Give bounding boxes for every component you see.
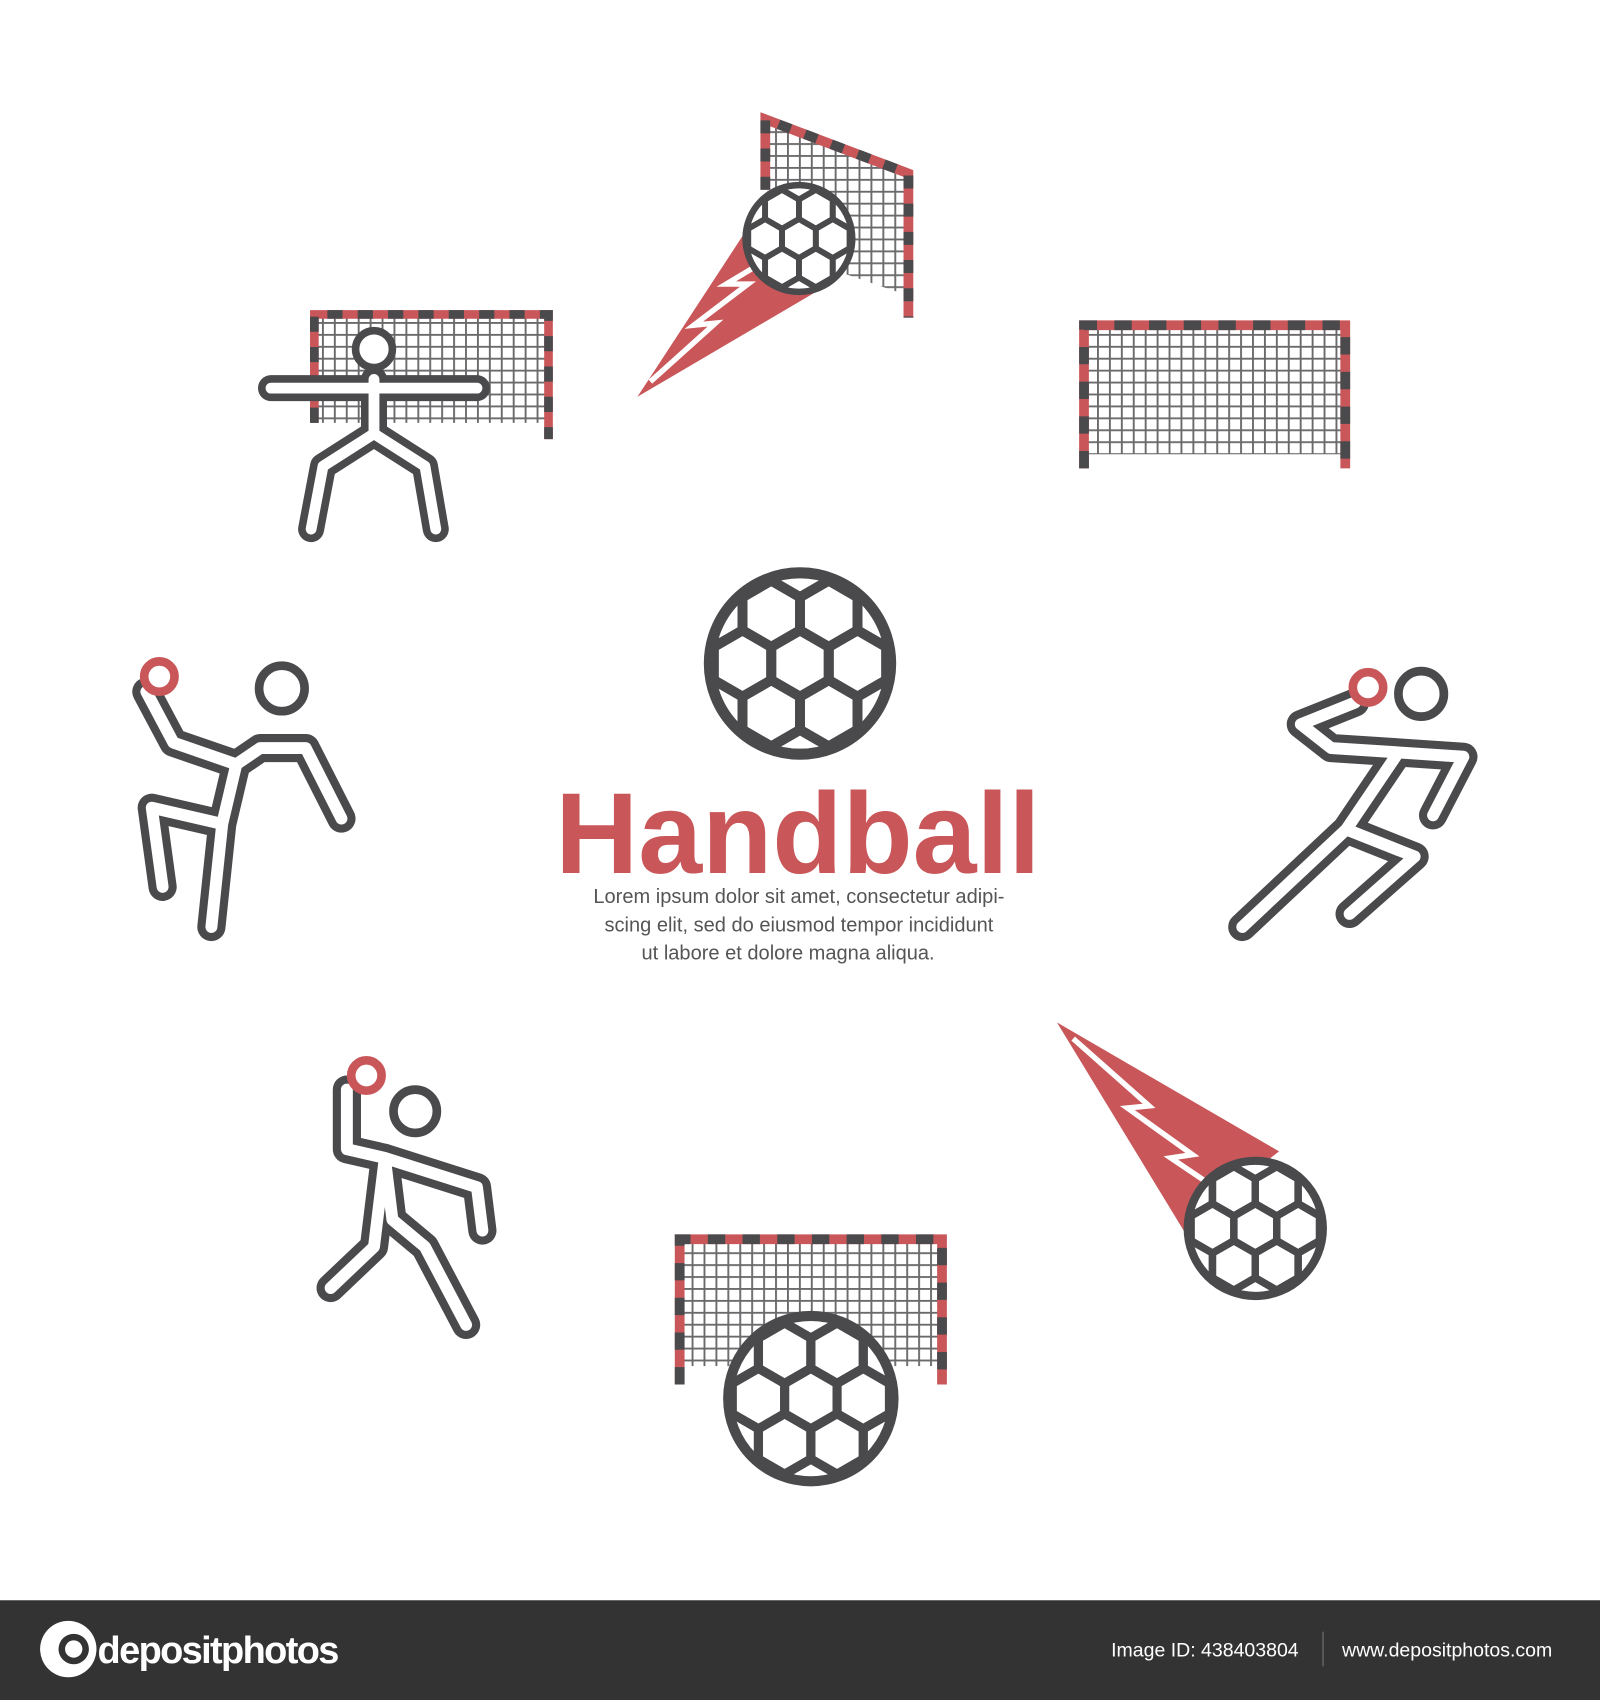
icon: player jumping xyxy=(331,1060,482,1325)
icon: ball shot into goal xyxy=(637,119,908,397)
text block: description xyxy=(593,886,1004,965)
logo: depositphotos xyxy=(98,1630,338,1672)
title: Handball xyxy=(555,770,1040,898)
icon: goal with ball xyxy=(680,1239,942,1520)
icon: flying ball xyxy=(1057,1022,1362,1327)
icon: player throwing left xyxy=(144,661,341,927)
icon: center ball xyxy=(656,531,944,796)
logo xyxy=(40,1621,338,1677)
text block: description: Lorem ipsum dolor sit amet, consectetur adipi- xyxy=(593,886,1004,908)
icon: goal xyxy=(1084,325,1345,468)
footer bar xyxy=(0,1600,1600,1700)
text block: description: ut labore et dolore magna aliqua. xyxy=(642,943,935,965)
footer text: Image ID: 438403804 xyxy=(1111,1640,1299,1662)
footer text: www.depositphotos.com xyxy=(1341,1640,1552,1662)
text block: description: scing elit, sed do eiusmod tempor incididunt xyxy=(604,914,994,936)
icon: goalkeeper in goal xyxy=(271,314,549,529)
footer text xyxy=(1111,1632,1552,1666)
icon: player running right xyxy=(1242,671,1463,927)
